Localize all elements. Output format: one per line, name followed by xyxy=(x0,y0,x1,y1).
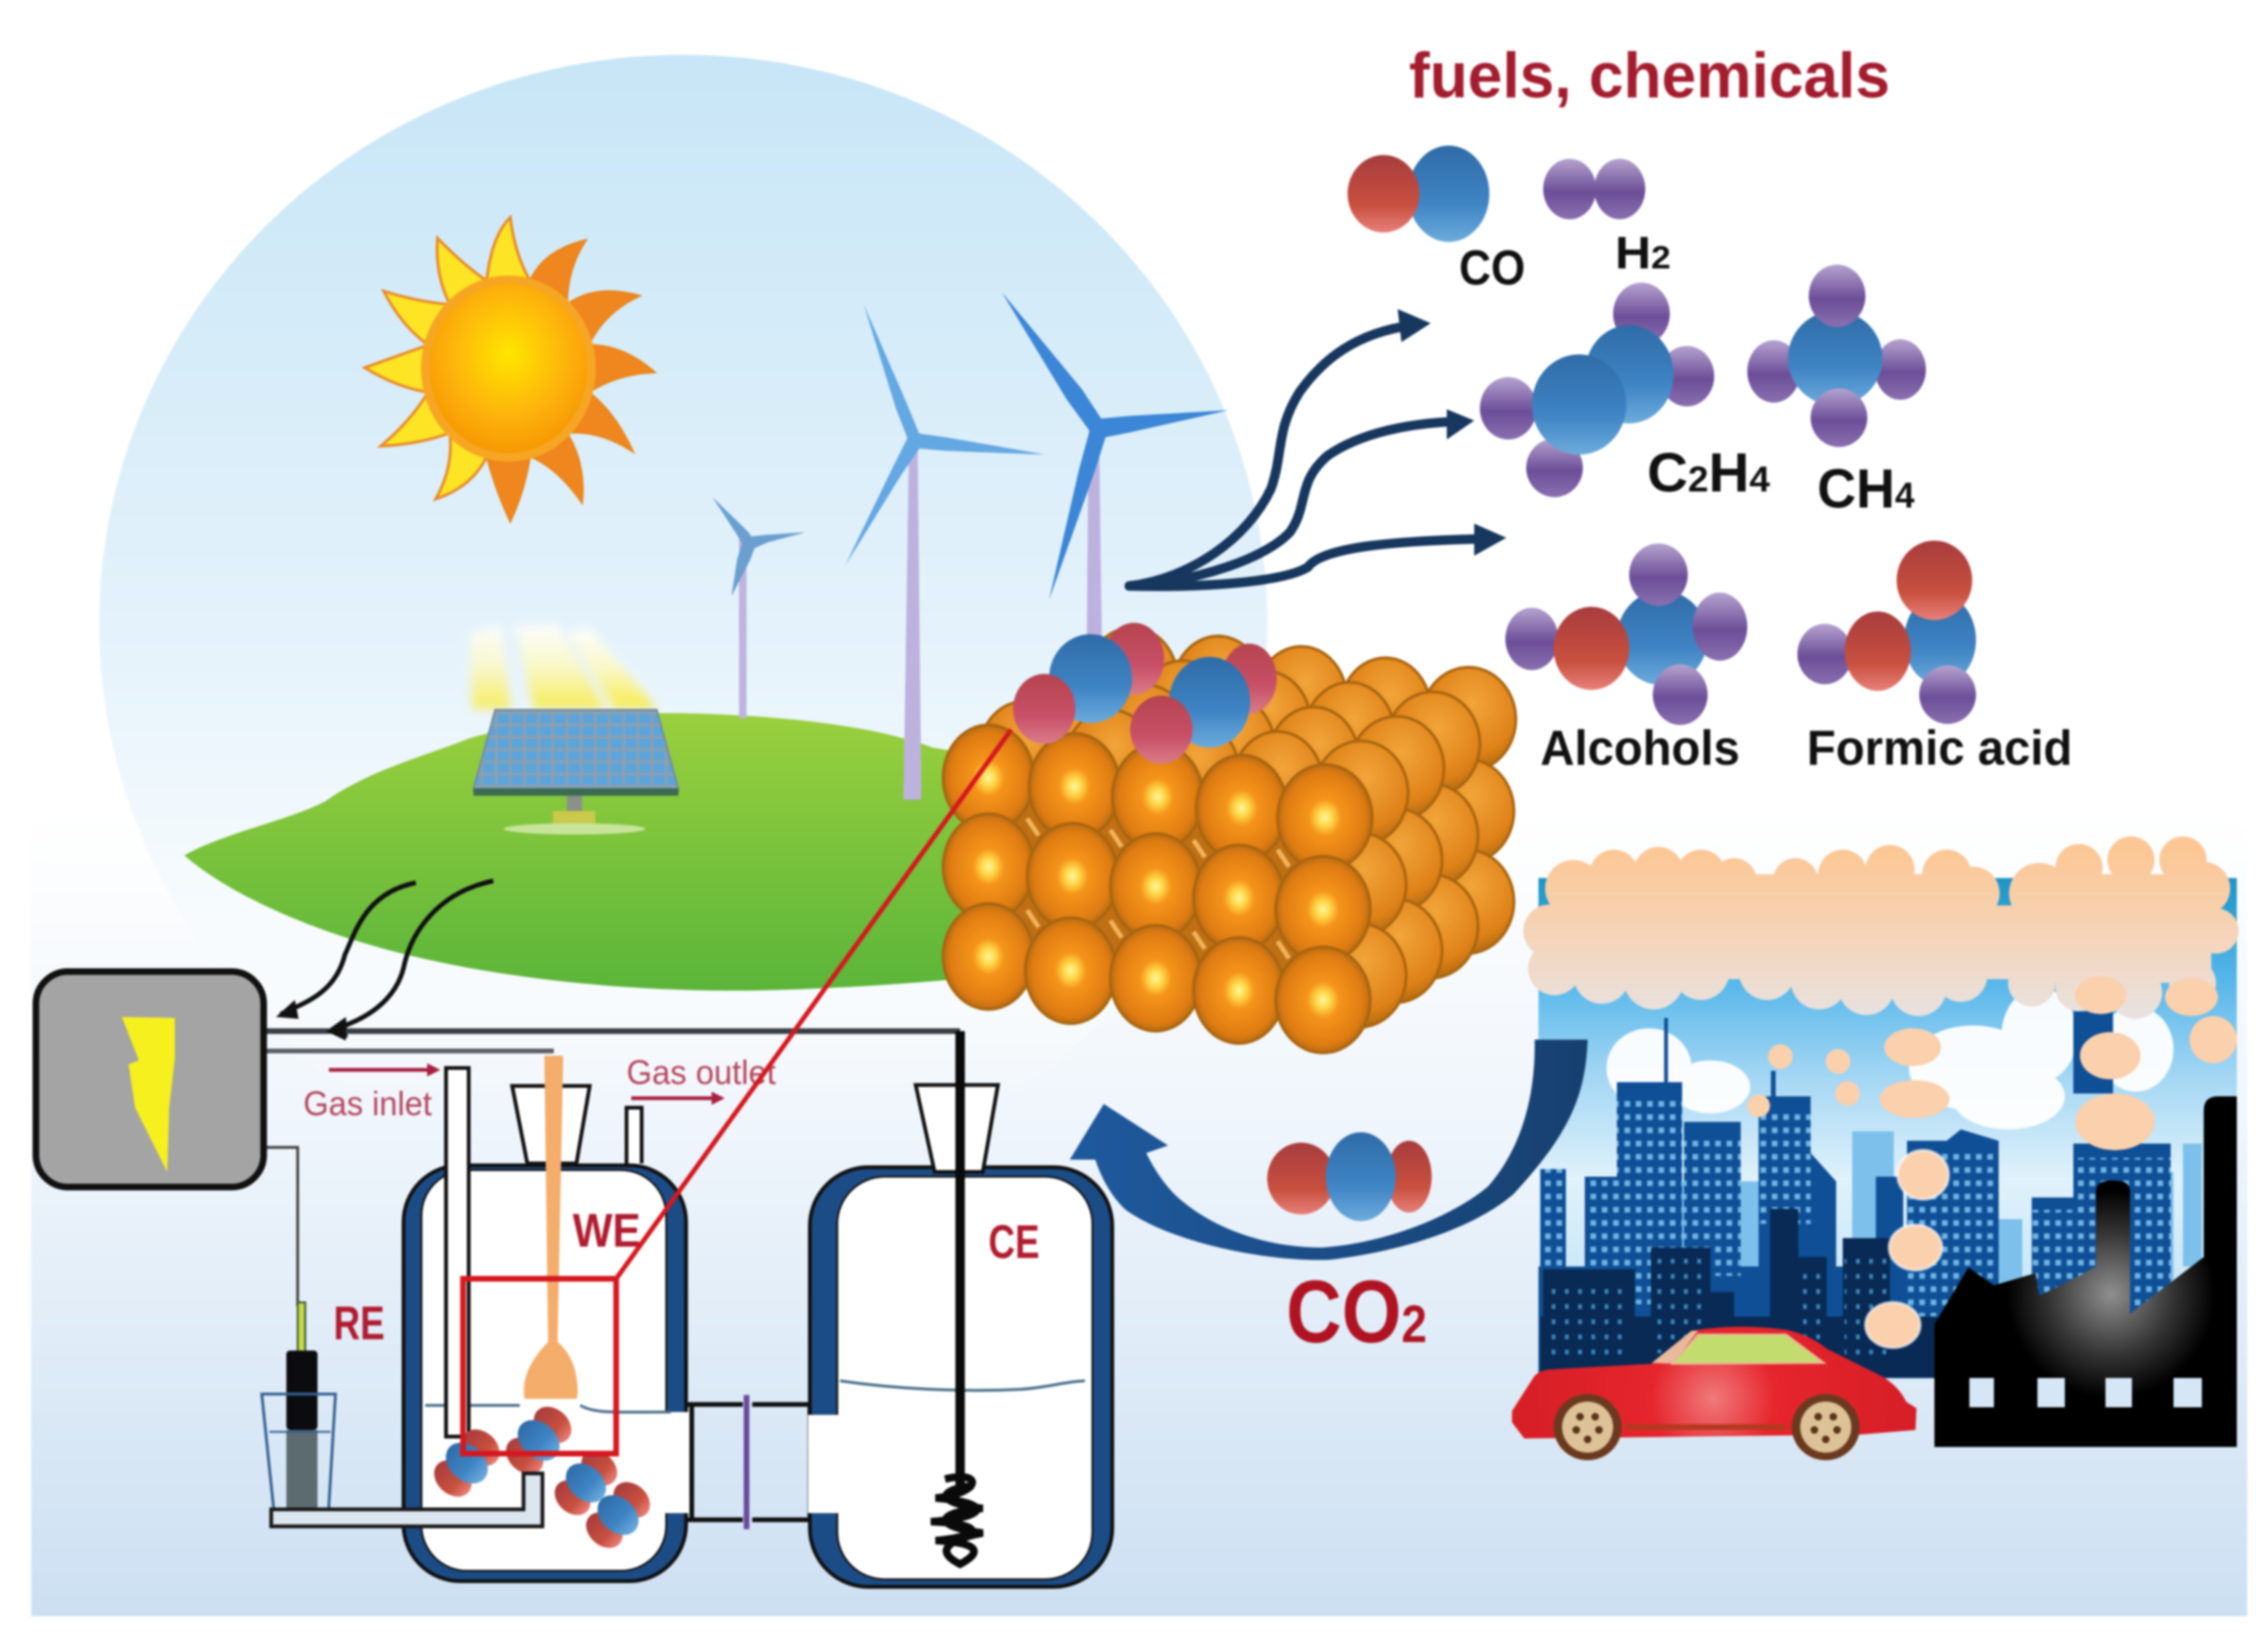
stopper xyxy=(916,1085,998,1172)
electrolyte level xyxy=(425,1405,671,1412)
yellow rays xyxy=(365,217,530,499)
large turbine xyxy=(1002,292,1228,643)
small turbine xyxy=(713,497,806,718)
wind turbines xyxy=(713,292,1228,800)
wires xyxy=(266,1031,960,1306)
label: Alcohols: Alcohols xyxy=(1540,721,1740,776)
arrow to C2H4 xyxy=(1129,422,1455,586)
arrowhead on supply wire xyxy=(326,1022,346,1041)
arrow to CO xyxy=(1129,325,1413,586)
city scene xyxy=(1512,836,2239,1460)
reference electrode xyxy=(262,1302,335,1522)
flow arrows to products xyxy=(1129,309,1506,586)
red zoom box and leader line xyxy=(463,730,1011,1454)
label: Formic acid: Formic acid xyxy=(1807,721,2072,776)
gas outlet arrow xyxy=(631,1092,725,1105)
adsorbed CO2 molecule left xyxy=(1013,623,1164,744)
sun xyxy=(365,217,655,522)
mid-blue buildings xyxy=(1538,1011,2171,1378)
label: Gas inlet: Gas inlet xyxy=(303,1084,432,1123)
electrode rod xyxy=(955,1031,965,1485)
label: CO2: CO2 xyxy=(1286,1262,1427,1361)
CO2 bubbles xyxy=(425,1398,659,1557)
label: CH4: CH4 xyxy=(1817,458,1915,520)
stopper xyxy=(512,1086,590,1163)
electrolyte level xyxy=(840,1381,1085,1390)
molecule: H2 xyxy=(1543,159,1645,219)
light buildings xyxy=(1606,1131,2202,1333)
copper catalyst cube xyxy=(943,623,1516,1053)
city sky xyxy=(1538,878,2237,1379)
back layers xyxy=(979,628,1516,1027)
red car xyxy=(1512,1327,1916,1460)
gas inlet arrow xyxy=(329,1063,440,1076)
label: CO: CO xyxy=(1459,241,1525,296)
membrane xyxy=(744,1395,749,1529)
pollution cloud bank xyxy=(1523,836,2239,1019)
molecule: CO2 xyxy=(1267,1132,1432,1221)
arrow to alcohols xyxy=(1129,539,1488,586)
adsorbed CO2 molecule right xyxy=(1130,644,1277,764)
label: C2H4: C2H4 xyxy=(1647,442,1770,504)
car rear window strip xyxy=(1652,1331,1698,1364)
black curved arrows from renewables to power supply xyxy=(276,881,493,1038)
factory xyxy=(1934,1096,2237,1447)
gas outlet tube xyxy=(627,1108,642,1163)
gas inlet tube xyxy=(446,1068,469,1437)
orange rays xyxy=(487,240,655,522)
molecule: CH4 xyxy=(1747,265,1926,447)
car sill xyxy=(1625,1424,1786,1430)
wheels xyxy=(1554,1394,1860,1460)
label: CE: CE xyxy=(988,1215,1040,1268)
heading: fuels, chemicals: fuels, chemicals xyxy=(1409,40,1890,112)
molecule: alcohol xyxy=(1505,543,1747,725)
big CO2 arrow xyxy=(1070,1040,1588,1260)
green hill xyxy=(184,714,1040,990)
counter electrode cell xyxy=(808,1031,1112,1587)
label: H2: H2 xyxy=(1615,229,1671,279)
solar panel xyxy=(470,624,679,835)
molecule: C2H4 xyxy=(1480,283,1714,497)
molecule: formic acid xyxy=(1797,541,1976,724)
sun rays on panel xyxy=(470,624,657,709)
sky circle xyxy=(99,55,1267,1193)
tan gaps between spheres xyxy=(1027,818,1289,958)
power supply xyxy=(36,972,264,1187)
factory windows xyxy=(1969,1378,2202,1407)
car windscreen xyxy=(1673,1335,1824,1364)
arrowheads xyxy=(1398,309,1506,556)
front layer xyxy=(943,725,1372,1053)
dark buildings xyxy=(1540,1209,1937,1378)
medium turbine xyxy=(845,304,1045,800)
molecule: CO xyxy=(1348,146,1489,242)
label: WE: WE xyxy=(573,1204,641,1257)
white clouds xyxy=(1606,988,2174,1129)
bridge with membrane xyxy=(687,1395,810,1529)
label: Gas outlet: Gas outlet xyxy=(627,1053,776,1092)
smoke puffs xyxy=(1747,976,2237,1348)
label: RE: RE xyxy=(334,1297,385,1350)
cube backing xyxy=(988,680,1469,1000)
icon: lightning bolt xyxy=(122,1017,175,1172)
front face backing xyxy=(988,778,1325,1000)
tube to reference xyxy=(271,1473,542,1526)
copper electrode xyxy=(524,1056,577,1399)
carbon mesh xyxy=(931,1477,983,1564)
working electrode cell xyxy=(271,1056,692,1581)
